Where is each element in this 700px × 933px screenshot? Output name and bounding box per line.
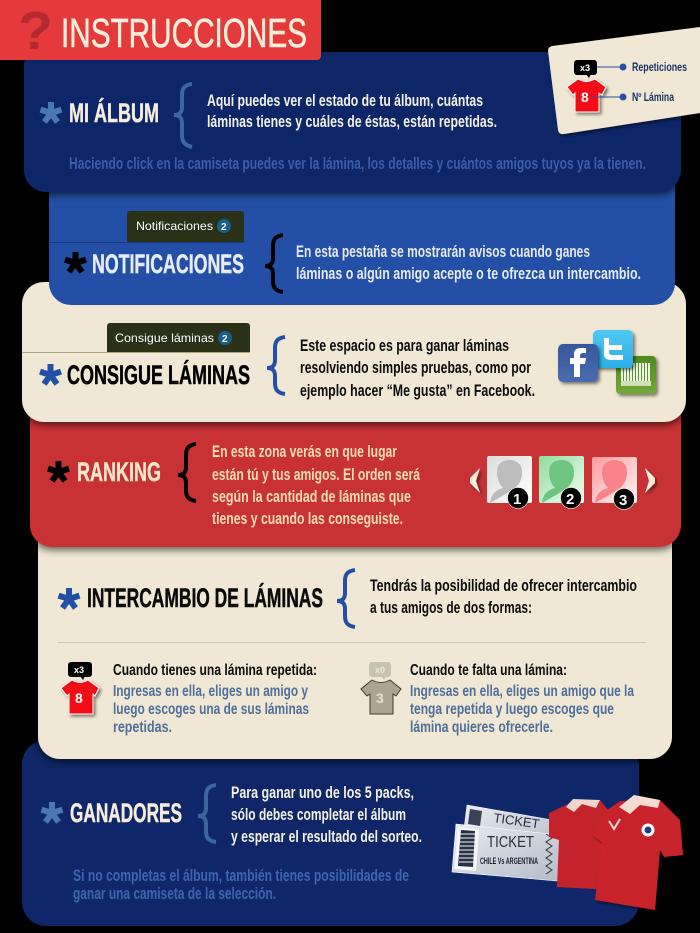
description: En esta zona verás en que lugar [212,442,397,461]
brace [178,444,196,501]
description: láminas tienes y cuáles de éstas, están repetidas. [207,112,497,131]
asterisk [42,802,62,822]
asterisk [58,588,80,608]
icon: question mark: ? [18,1,53,61]
arrow: right [645,468,655,493]
note [73,866,409,903]
option: missing: Cuando te falta una lámina: [410,662,567,679]
heading: CONSIGUE LÁMINAS [67,359,250,390]
asterisk [65,252,86,272]
heading: MI ÁLBUM [69,97,159,128]
icon: facebook [558,344,598,382]
avatar 2 [539,456,584,508]
header [0,0,321,61]
section: ranking [48,442,655,528]
icon: back shirt [549,799,612,890]
panel: consigue background [22,282,686,422]
icon: tickets: TICKET [493,810,541,831]
legend labels [632,62,687,104]
option: missing: Ingresas en ella, eliges un amigo que la [410,683,634,700]
title: INSTRUCCIONES [61,10,307,56]
brace [267,337,285,394]
description: Aquí puedes ver el estado de tu álbum, cuántas [207,91,483,110]
description: sólo debes completar el álbum [231,805,406,824]
shirt: missing [361,662,401,714]
heading: RANKING [77,457,161,487]
icon: twitter [593,330,633,368]
shirt: missing: x0 [375,665,385,675]
note: ganar una camiseta de la selección. [73,884,276,903]
panel: ranking background [30,410,681,547]
shirt icon [567,60,606,112]
section: mi album [40,84,646,173]
option: missing: tenga repetida y luego escoges que [410,701,614,718]
option: repeated [113,662,317,736]
avatar 3 [592,457,637,510]
panel: mi album background [24,52,681,192]
avatar 3: 3 [619,492,627,509]
legend labels: Nº Lámina [632,92,674,104]
shirt: repeated: x3 [74,665,84,675]
heading: NOTIFICACIONES [92,249,244,279]
note: Si no completas el álbum, también tienes posibilidades de [73,866,409,885]
icon: tickets: TICKET [487,834,534,851]
shirt: repeated: 8 [75,690,83,706]
description [231,783,422,846]
description [370,576,637,617]
description: tienes y cuando las conseguiste. [212,509,403,528]
asterisk [40,102,62,122]
tab: Notificaciones [136,219,213,233]
description: Este espacio es para ganar láminas [300,336,509,355]
description [212,442,420,528]
description [296,242,641,283]
option: missing [410,662,634,736]
tab [22,323,250,352]
description: ejemplo hacer “Me gusta” en Facebook. [300,381,535,400]
brace [337,570,355,627]
option: repeated: Cuando tienes una lámina repetida: [113,662,317,679]
avatar 2: 2 [566,491,574,508]
heading: GANADORES [70,798,182,828]
avatar 1 [487,456,532,508]
avatar 1: 1 [513,491,521,508]
option: repeated: Ingresas en ella, eliges un amigo y [113,683,308,700]
description: y esperar el resultado del sorteo. [231,827,422,846]
option: missing: lámina quieres ofrecerle. [410,719,553,736]
brace [265,235,283,292]
section: consigue laminas [22,323,656,400]
connector lines [592,64,626,100]
brace [198,785,216,842]
asterisk [48,461,69,481]
arrow: left [470,468,480,493]
tab: 2 [221,222,227,233]
panel: intercambio background [38,535,672,759]
panel: ganadores background [22,740,639,926]
shirt: missing: 3 [376,690,384,706]
section: intercambio [58,570,646,736]
description: resolviendo simples pruebas, como por [300,358,531,377]
description: a tus amigos de dos formas: [370,598,532,617]
icon: barcode app [616,356,656,394]
option: repeated: luego escoges una de sus láminas [113,701,309,718]
description: están tú y tus amigos. El orden será [212,465,420,484]
heading: INTERCAMBIO DE LÁMINAS [87,582,323,613]
tab: 2 [222,334,228,345]
icon: tickets [452,805,560,881]
tab: Consigue láminas [115,331,214,345]
shirt: repeated [61,662,99,714]
icon: tickets: CHILE Vs ARGENTINA [480,856,538,866]
option: repeated: repetidas. [113,719,172,736]
section: notificaciones [49,211,641,292]
shirt icon: x3 [580,63,590,73]
brace [174,84,192,147]
asterisk [40,364,61,384]
section: ganadores [42,783,683,910]
description: según la cantidad de láminas que [212,487,411,506]
icon: front shirt [592,795,683,910]
card: legend [548,27,700,134]
panel: notificaciones background [49,180,675,305]
shirt icon: 8 [581,89,589,105]
description [300,336,535,400]
tab [49,211,244,242]
description: Para ganar uno de los 5 packs, [231,783,414,802]
description [207,91,497,131]
